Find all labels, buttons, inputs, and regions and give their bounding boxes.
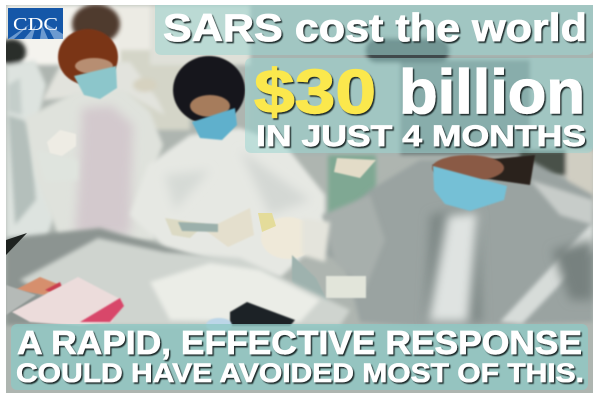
person: background worker — [42, 4, 165, 115]
message line two: COULD HAVE AVOIDED MOST OF THIS. — [16, 358, 584, 388]
logo: CDC — [8, 8, 63, 39]
figure: $30 billion — [254, 58, 585, 127]
subheading: in just 4 months: IN JUST 4 MONTHS — [256, 120, 586, 153]
person: central worker — [130, 56, 325, 278]
panel: headline background — [155, 5, 593, 55]
person: male worker with pipette — [258, 155, 593, 326]
figure value: $30: $30 — [254, 58, 376, 127]
photo background: lab wall — [6, 5, 595, 225]
person: worker with red hair — [25, 29, 163, 240]
person: far left worker — [6, 36, 53, 240]
lab bench with papers — [6, 228, 350, 332]
figure unit: billion: billion — [399, 58, 585, 127]
panel: cost figure background — [245, 58, 593, 153]
message line one: A RAPID, EFFECTIVE RESPONSE — [17, 324, 582, 361]
logo: CDC: CDC — [13, 14, 58, 34]
heading: SARS cost the world: SARS cost the world — [163, 7, 587, 50]
panel: bottom message background — [11, 324, 588, 390]
